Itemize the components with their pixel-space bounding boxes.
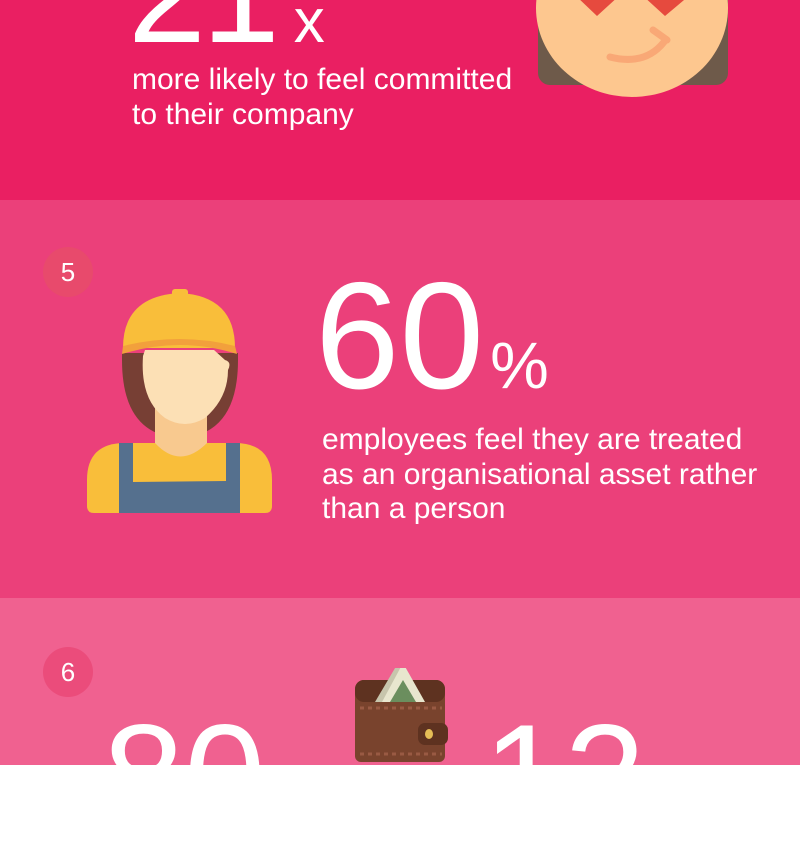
text: asset xyxy=(322,423,757,525)
text: asset: employees feel they are treated xyxy=(322,423,742,456)
badge: 5 xyxy=(43,247,93,297)
panel: section 5 xyxy=(0,200,800,598)
icon: wallet xyxy=(355,668,448,762)
stat: 12: 12 xyxy=(483,694,645,857)
stat: 60%: 60% xyxy=(315,251,549,421)
text: committed xyxy=(132,63,512,130)
panel: section 4 xyxy=(0,0,800,200)
text: committed: to their company xyxy=(132,98,354,130)
badge: 6: 6 xyxy=(61,657,75,687)
badge: 5: 5 xyxy=(61,257,75,287)
badge: 6 xyxy=(43,647,93,697)
icon: heart-eyes face xyxy=(536,0,728,97)
text: asset: as an organisational asset rather xyxy=(322,458,757,490)
icon: worker xyxy=(87,289,272,513)
stat: 89: 80 xyxy=(103,694,265,857)
text: asset: than a person xyxy=(322,492,505,525)
text: committed: more likely to feel committed xyxy=(132,63,512,96)
panel: section 6 xyxy=(0,598,800,765)
